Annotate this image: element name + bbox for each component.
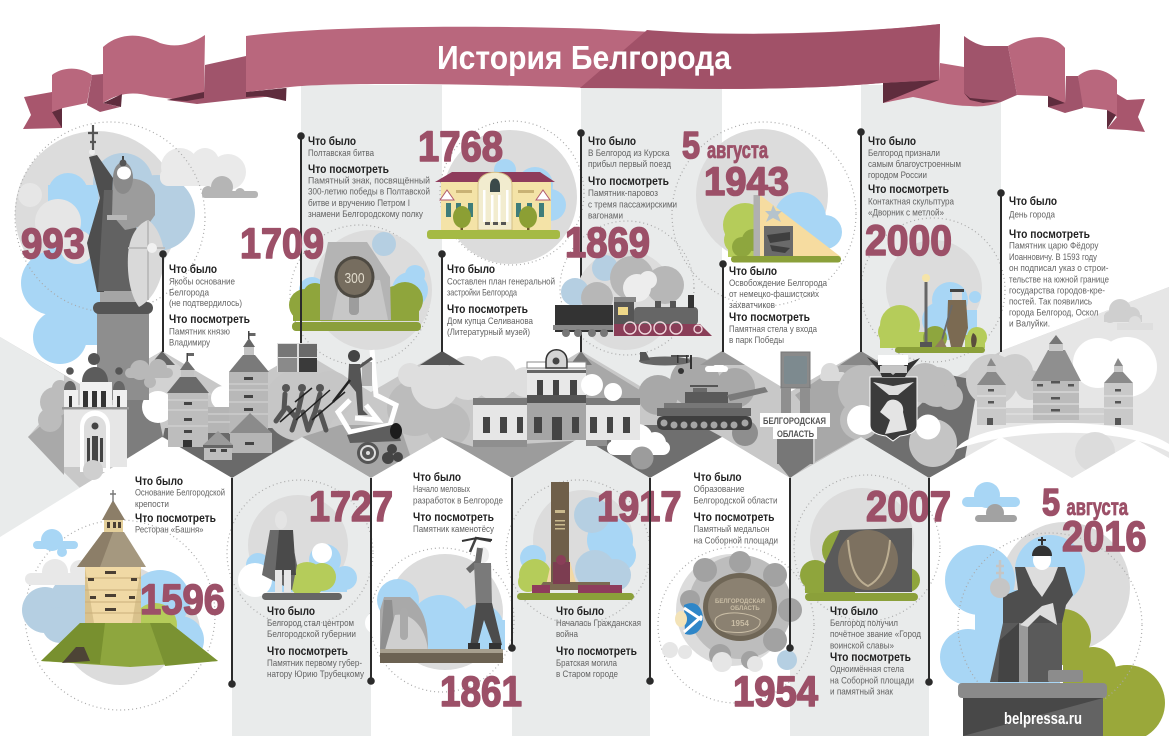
band: railway station building bbox=[473, 350, 640, 447]
year: 993 bbox=[21, 220, 85, 268]
text block: Что было bbox=[135, 476, 183, 488]
text block: Что посмотреть bbox=[413, 512, 494, 524]
text block: Белгород стал центром bbox=[267, 617, 354, 628]
date and year: августа bbox=[707, 137, 768, 163]
text block: воинской славы» bbox=[830, 640, 894, 650]
band: tank bbox=[657, 385, 768, 430]
medallion text bbox=[715, 599, 765, 628]
text block: Что посмотреть bbox=[830, 652, 911, 664]
text block: Что было bbox=[267, 606, 315, 618]
text block: Памятник князю bbox=[169, 326, 230, 336]
text block: Белгород получил bbox=[830, 617, 898, 628]
year: 2000 bbox=[865, 217, 952, 265]
text block: захватчиков bbox=[729, 299, 775, 310]
text block: государства городов-кре- bbox=[1009, 284, 1105, 296]
text block bbox=[447, 264, 555, 337]
text block: Что было bbox=[413, 472, 461, 484]
text block: постей. Так появились bbox=[1009, 296, 1092, 306]
sign label line 2: ОБЛАСТЬ bbox=[777, 429, 814, 440]
text block: и Валуйки. bbox=[1009, 318, 1050, 328]
text block: знамени Белгородскому полку bbox=[308, 208, 423, 219]
text block: Что посмотреть bbox=[556, 646, 637, 658]
text block: Основание Белгородской bbox=[135, 486, 225, 498]
text block bbox=[267, 606, 364, 679]
text block: Ресторан «Башня» bbox=[135, 524, 204, 534]
text block: Что было bbox=[868, 136, 916, 148]
illustration: stonecutter monument bbox=[365, 538, 505, 670]
text block: Что было bbox=[556, 606, 604, 618]
text block bbox=[830, 606, 921, 696]
text block: Что посмотреть bbox=[135, 513, 216, 525]
band: wooden fortress bbox=[125, 331, 272, 460]
text block: от немецко-фашистских bbox=[729, 288, 819, 299]
text block: в парк Победы bbox=[729, 334, 784, 345]
band: coat of arms bbox=[867, 355, 920, 441]
text block: Памятник первому губер- bbox=[267, 657, 362, 668]
band: cathedral bbox=[62, 353, 129, 480]
text block: Что посмотреть bbox=[729, 312, 810, 324]
connector line bbox=[719, 260, 727, 352]
text block: Владимиру bbox=[169, 336, 210, 348]
illustration: mass grave memorial bbox=[517, 482, 636, 600]
date and year: 5 bbox=[682, 125, 700, 167]
text block: Памятный знак, посвящённый bbox=[308, 174, 430, 186]
connector line bbox=[438, 250, 446, 352]
connector line bbox=[925, 478, 933, 686]
text block: Белгорода bbox=[169, 286, 210, 298]
band: restored fortress bbox=[977, 335, 1133, 425]
sign label line 1: БЕЛГОРОДСКАЯ bbox=[763, 416, 826, 427]
text block bbox=[556, 606, 641, 679]
text block: Одноимённая стела bbox=[830, 663, 905, 674]
connector line bbox=[297, 132, 305, 352]
text block: Что было bbox=[588, 136, 636, 148]
panel: 1954 bbox=[646, 472, 818, 716]
text block: Начало меловых bbox=[413, 483, 470, 494]
text block: Что посмотреть bbox=[447, 304, 528, 316]
panel: 1917 bbox=[506, 478, 682, 679]
title: История Белгорода bbox=[437, 39, 732, 76]
text block: «Дворник с метлой» bbox=[868, 206, 944, 218]
text block: на Соборной площади bbox=[694, 534, 778, 546]
text block bbox=[169, 264, 250, 348]
title ribbon bbox=[23, 24, 1145, 132]
text block bbox=[413, 472, 503, 534]
text block: Братская могила bbox=[556, 657, 618, 668]
connector line bbox=[577, 129, 585, 352]
text block: Полтавская битва bbox=[308, 147, 375, 158]
band: soldiers and Poltava flag bbox=[276, 343, 345, 430]
year: 1727 bbox=[309, 483, 393, 531]
text block: разработок в Белгороде bbox=[413, 494, 503, 506]
connector line bbox=[997, 189, 1005, 352]
text block: с тремя пассажирскими bbox=[588, 198, 677, 210]
medallion text: ОБЛАСТЬ bbox=[730, 606, 760, 612]
year: 1596 bbox=[140, 576, 225, 624]
panel: 1709 bbox=[240, 132, 432, 365]
connector line bbox=[508, 478, 516, 652]
panel: city day bbox=[997, 189, 1153, 352]
connector line bbox=[857, 128, 865, 352]
medallion text: 1954 bbox=[731, 619, 749, 628]
text block: Якобы основание bbox=[169, 276, 235, 286]
text block bbox=[1009, 196, 1109, 328]
text block: Что было bbox=[308, 136, 356, 148]
text block: на Соборной площади bbox=[830, 674, 914, 686]
text block: битве и вручению Петром I bbox=[308, 197, 410, 208]
illustration: janitor sculpture bbox=[878, 240, 987, 353]
text block: он подписал указ о строи- bbox=[1009, 262, 1108, 273]
panel: 2007 bbox=[786, 475, 951, 696]
connector line bbox=[786, 478, 794, 652]
date and year: августа bbox=[1066, 494, 1128, 520]
band: biplane bbox=[639, 352, 692, 374]
text block: Началась Гражданская bbox=[556, 617, 641, 628]
text block: Что посмотреть bbox=[267, 646, 348, 658]
date and year: 1943 bbox=[704, 160, 789, 204]
panel: 1768 bbox=[418, 121, 584, 352]
date and year bbox=[1042, 482, 1146, 561]
date and year: 2016 bbox=[1062, 513, 1146, 561]
illustration: medallion on Cathedral Square bbox=[662, 551, 802, 672]
text block: почётное звание «Город bbox=[830, 628, 921, 639]
text block: натору Юрию Трубецкому bbox=[267, 668, 364, 679]
year: 1768 bbox=[418, 123, 503, 171]
text block: война bbox=[556, 628, 579, 639]
text block: вагонами bbox=[588, 210, 623, 220]
connector line bbox=[646, 478, 654, 685]
panel: 1869 bbox=[553, 129, 712, 355]
text block: Что посмотреть bbox=[694, 512, 774, 524]
date and year bbox=[682, 125, 789, 204]
text block: Что было bbox=[447, 264, 495, 276]
text block: застройки Белгорода bbox=[447, 286, 518, 298]
text block: Памятник каменотёсу bbox=[413, 523, 494, 534]
text block: Что было bbox=[169, 264, 217, 276]
text block: Что было bbox=[729, 266, 777, 278]
text block: Памятная стела у входа bbox=[729, 323, 818, 334]
panel: 1727 bbox=[227, 478, 393, 688]
text block: Что было bbox=[694, 472, 742, 484]
medal text: 300 bbox=[344, 270, 364, 287]
illustration: steam locomotive bbox=[553, 250, 712, 350]
medallion text: БЕЛГОРОДСКАЯ bbox=[715, 599, 765, 605]
text block: самым благоустроенным bbox=[868, 158, 961, 169]
illustration: fortress tower on hill bbox=[22, 490, 218, 685]
illustration: Tsar Fyodor monument bbox=[940, 522, 1165, 736]
text block: Белгородской губернии bbox=[267, 628, 356, 639]
cloud bbox=[1104, 299, 1153, 330]
text block: Что было bbox=[1009, 196, 1057, 208]
text block: Иоанновичу. В 1593 году bbox=[1009, 251, 1097, 262]
illustration: Selivanov house bbox=[427, 130, 577, 264]
text block: 300-летию победы в Полтавской bbox=[308, 186, 430, 196]
clouds bbox=[962, 482, 1020, 522]
text block: Образование bbox=[694, 483, 744, 494]
site label: belpressa.ru bbox=[1004, 709, 1082, 728]
text block: (Литературный музей) bbox=[447, 326, 530, 337]
text block: Памятный медальон bbox=[694, 523, 770, 534]
year: 2007 bbox=[866, 483, 951, 531]
band: oblast sign bbox=[760, 352, 830, 478]
text block: Что посмотреть bbox=[588, 176, 669, 188]
text block: Освобождение Белгорода bbox=[729, 277, 828, 288]
text block: Белгородской области bbox=[694, 494, 778, 506]
text block: и памятный знак bbox=[830, 686, 894, 696]
text block: Белгород признали bbox=[868, 147, 940, 158]
connector line bbox=[367, 478, 375, 685]
text block: Памятник царю Фёдору bbox=[1009, 240, 1099, 250]
text block: День города bbox=[1009, 208, 1056, 220]
text block: в Старом городе bbox=[556, 668, 618, 679]
year: 1869 bbox=[565, 219, 650, 267]
text block: Дом купца Селиванова bbox=[447, 315, 534, 326]
text block: (не подтвердилось) bbox=[169, 297, 242, 308]
text block: крепости bbox=[135, 498, 169, 509]
panel: 993 bbox=[15, 122, 258, 400]
text block: тельстве на южной границе bbox=[1009, 274, 1109, 284]
year: 1917 bbox=[597, 483, 682, 531]
text block: Памятник-паровоз bbox=[588, 187, 658, 198]
illustration: City of military glory stele bbox=[800, 488, 920, 601]
central illustrated band background bbox=[0, 287, 1169, 537]
year: 1861 bbox=[440, 668, 522, 716]
illustration: memorial stone 300 bbox=[289, 230, 432, 350]
connector line bbox=[228, 478, 236, 688]
text block bbox=[308, 136, 430, 219]
text block: Что посмотреть bbox=[308, 164, 389, 176]
panel: 5 августа 2016 bbox=[925, 478, 1165, 736]
text block bbox=[868, 136, 961, 218]
text block: Контактная скульптура bbox=[868, 196, 955, 206]
panel: 1861 bbox=[365, 472, 522, 716]
year: 1954 bbox=[733, 668, 818, 716]
illustration: Trubetskoy monument bbox=[238, 495, 357, 600]
lower field bbox=[0, 437, 1169, 736]
date and year: 5 bbox=[1042, 482, 1060, 524]
band: cannon bbox=[347, 423, 403, 464]
text block bbox=[588, 136, 677, 220]
text block: Что посмотреть bbox=[1009, 229, 1090, 241]
illustration: victory park stele bbox=[696, 129, 842, 262]
connector line bbox=[159, 250, 167, 352]
illustration: monument to Prince Vladimir bbox=[15, 122, 258, 400]
text block: Составлен план генеральной bbox=[447, 276, 555, 286]
text block: В Белгород из Курска bbox=[588, 147, 670, 158]
text block: города Белгород, Оскол bbox=[1009, 306, 1098, 318]
background stripes bbox=[301, 85, 1001, 395]
text block bbox=[135, 476, 225, 534]
panel: 5 августа 1943 bbox=[672, 122, 856, 352]
band: Peter monument bbox=[333, 350, 396, 432]
text block: Что посмотреть bbox=[868, 184, 949, 196]
panel: 2000 bbox=[857, 128, 1005, 362]
year: 1709 bbox=[240, 220, 324, 268]
text block: прибыл первый поезд bbox=[588, 158, 671, 169]
panel: 1596 bbox=[22, 476, 225, 710]
text block: Что посмотреть bbox=[169, 314, 250, 326]
text block bbox=[694, 472, 778, 546]
text block bbox=[729, 266, 828, 345]
text block: Что было bbox=[830, 606, 878, 618]
text block: городом России bbox=[868, 169, 927, 180]
